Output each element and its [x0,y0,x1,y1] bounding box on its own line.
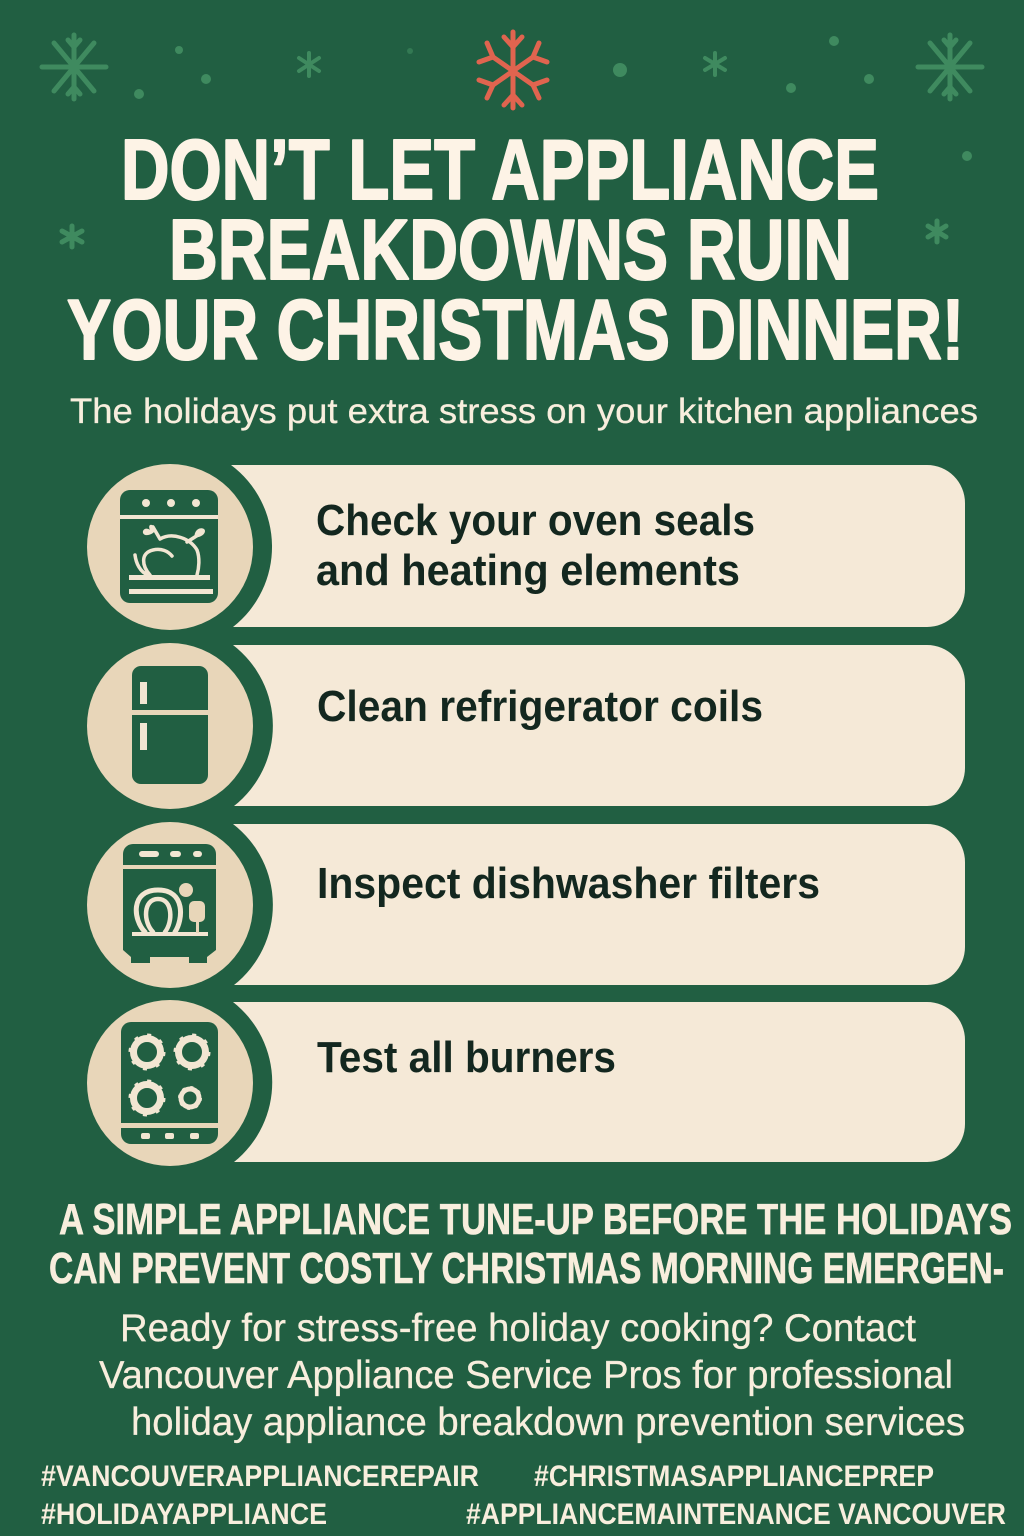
icon: oven with turkey [87,464,253,630]
hashtags: #CHRISTMASAPPLIANCEPREP [534,1460,934,1493]
tip text: refrigerator: Clean refrigerator coils [317,682,763,731]
title [67,123,964,378]
tip text: oven: and heating elements [316,546,740,595]
pill: burners [233,1002,965,1162]
hashtags: #HOLIDAYAPPLIANCE [41,1498,327,1531]
call to action text: Vancouver Appliance Service Pros for professional [99,1354,953,1397]
tip text: burners: Test all burners [317,1033,616,1082]
pill: refrigerator [233,645,965,806]
icon: red snowflake [479,32,547,108]
panel: refrigerator tip [87,643,965,809]
pill: oven [231,465,965,627]
subtitle: The holidays put extra stress on your kitchen appliances [70,392,978,431]
icon: cooktop [87,1000,253,1166]
bold callout [49,1195,1012,1293]
panel: dishwasher tip [87,822,965,988]
hashtags [41,1460,1006,1531]
call to action text [99,1307,965,1444]
call to action text: Ready for stress-free holiday cooking? Contact [120,1307,916,1350]
panel: oven tip [87,464,965,630]
decorative snowflakes and dots [42,35,982,247]
title: BREAKDOWNS RUIN [169,203,852,298]
tip text: oven: Check your oven seals [316,496,755,545]
icon: dishwasher [87,822,253,988]
call to action text: holiday appliance breakdown prevention services [131,1401,965,1444]
hashtags: #VANCOUVERAPPLIANCEREPAIR [41,1460,479,1493]
tip text: oven [316,496,755,595]
icon: refrigerator [87,643,253,809]
panel: burners tip [87,1000,965,1166]
tip text: dishwasher: Inspect dishwasher filters [317,859,820,908]
pill: dishwasher [233,824,965,985]
